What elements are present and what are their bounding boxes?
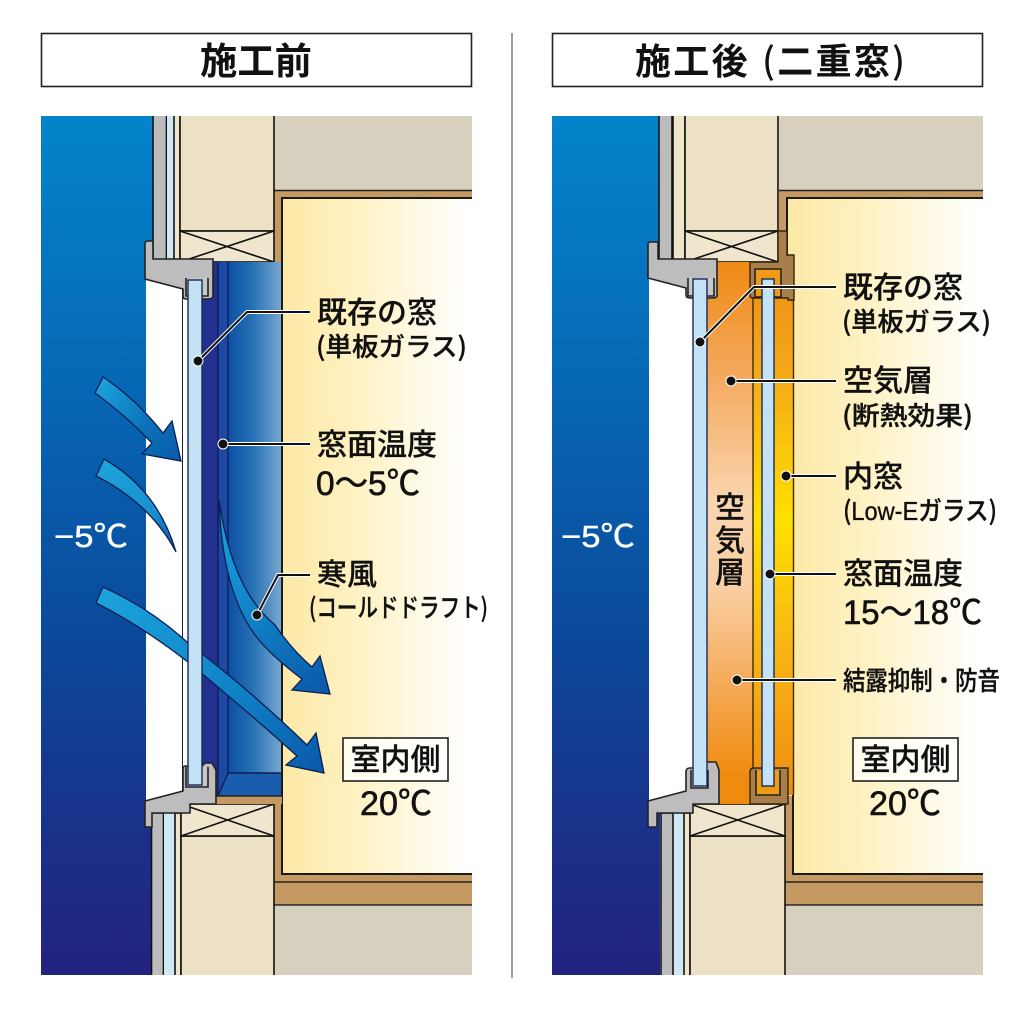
window sill air gap (182, 262, 282, 804)
callout: air layer (726, 365, 973, 433)
bottom outer frame (648, 762, 719, 827)
top window frame (145, 241, 213, 299)
callout: existing window: (単板ガラス) (842, 302, 991, 339)
outdoor cold air (41, 116, 154, 975)
interior wall upper (779, 116, 983, 191)
callout: existing window (193, 297, 467, 366)
interior wall lower (274, 906, 472, 975)
existing glass (188, 280, 202, 785)
air layer vertical label: 層 (715, 557, 745, 590)
header: after (552, 33, 982, 86)
callout: window surface temperature: 窓面温度 (843, 558, 963, 591)
callout: window surface temperature (218, 429, 437, 503)
exterior white reveal (649, 278, 686, 801)
indoor temperature: 20℃ (869, 785, 941, 823)
indoor temperature: 20℃ (360, 785, 432, 823)
bottom inner frame (750, 768, 788, 804)
indoor temperature (853, 738, 958, 823)
air layer (707, 262, 753, 804)
callout: existing window: 既存の窓 (317, 297, 437, 330)
bottom window frame (145, 763, 216, 827)
cold draft arrow (219, 500, 330, 694)
interior wood trim (779, 190, 983, 905)
outside temperature: −5℃ (54, 519, 128, 554)
callout: inner window: (Low-Eガラス) (843, 491, 997, 528)
header: after: 施工後 (二重窓) (635, 33, 905, 85)
wall section upper (659, 114, 778, 262)
wind arrow 2 (96, 459, 176, 552)
callout: condensation and sound: 結露抑制・防音 (843, 666, 1000, 696)
callout: cold draft: (コールドドラフト) (309, 588, 488, 625)
wall section upper (153, 114, 274, 262)
callout: existing window: (単板ガラス) (316, 327, 467, 364)
callout: cold draft (252, 559, 488, 625)
room interior (282, 198, 472, 874)
header: before (42, 34, 472, 86)
existing glass (693, 279, 707, 786)
room interior (787, 198, 983, 874)
top inner frame (750, 231, 794, 300)
callout: existing window: 既存の窓 (843, 272, 963, 305)
top outer frame (648, 242, 717, 298)
callout: window surface temperature: 窓面温度 (317, 429, 437, 462)
wall section lower (661, 804, 785, 977)
panel: after construction (552, 114, 1000, 977)
callout: window surface temperature (765, 558, 982, 632)
indoor temperature (343, 738, 448, 823)
callout: window surface temperature: 0〜5℃ (316, 465, 420, 503)
callout: inner window (781, 461, 997, 528)
callout: existing window (695, 272, 991, 347)
interior wood trim (274, 190, 472, 905)
outside temperature: −5℃ (561, 519, 635, 554)
wind arrow 3 (96, 587, 324, 773)
indoor temperature: 室内側 (860, 744, 950, 777)
header: before: 施工前 (200, 41, 312, 82)
panel: before construction (41, 114, 488, 977)
wall section lower (152, 804, 274, 977)
air layer vertical label: 空 (715, 492, 745, 525)
callout: cold draft: 寒風 (317, 559, 377, 592)
indoor temperature: 室内側 (350, 744, 440, 777)
callout: window surface temperature: 15〜18℃ (843, 594, 982, 632)
air layer vertical label: 気 (715, 525, 745, 558)
air layer vertical label (715, 492, 745, 590)
callout: condensation and sound (732, 666, 1000, 696)
wind arrow 1 (95, 377, 181, 461)
callout: air layer: 空気層 (843, 365, 933, 398)
outdoor cold air (552, 116, 660, 975)
exterior white reveal (146, 280, 182, 801)
interior wall lower (785, 906, 983, 975)
interior wall upper (274, 116, 472, 191)
warm inner strips (753, 298, 794, 795)
callout: inner window: 内窓 (843, 461, 903, 494)
inner glass (762, 279, 774, 786)
callout: air layer: (断熱効果 ) (842, 396, 973, 433)
